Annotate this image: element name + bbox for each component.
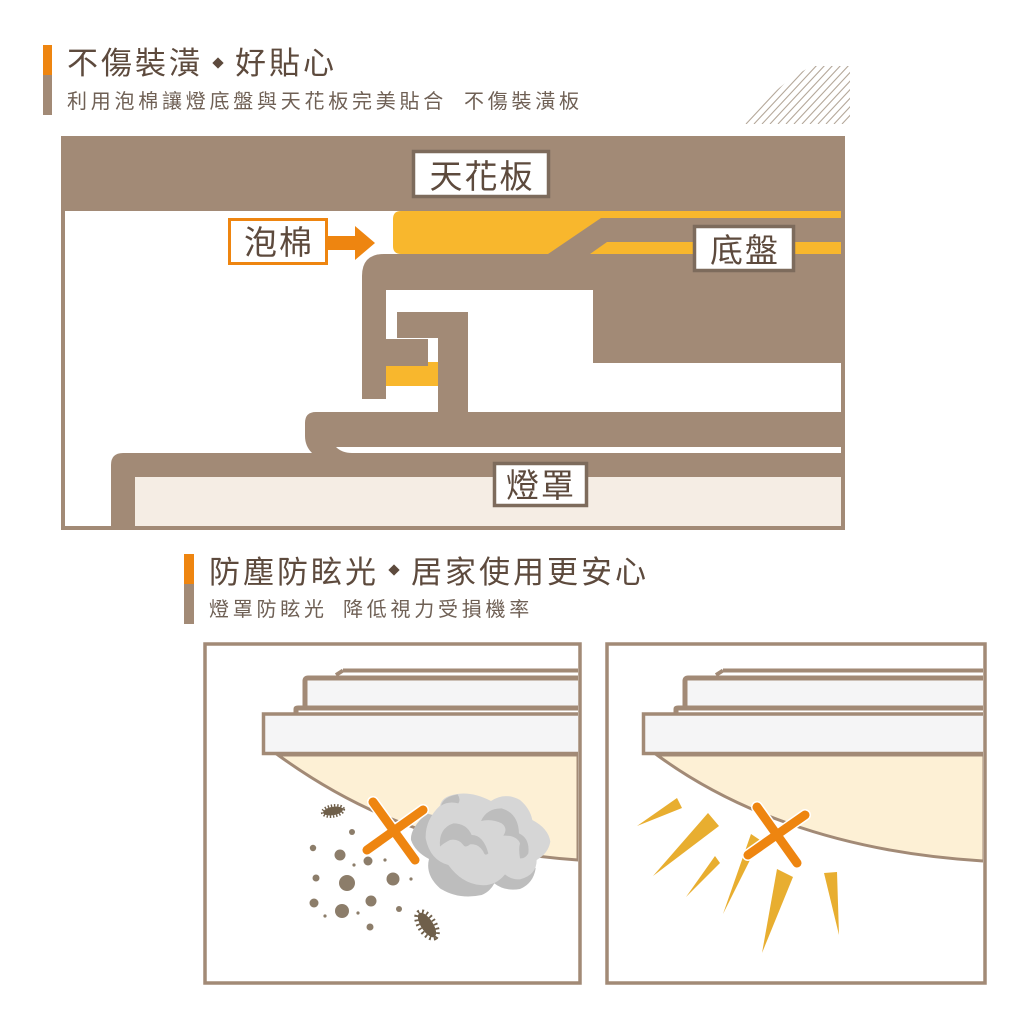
label: base plate: 底盤 [710, 232, 780, 269]
panel: dust protection [205, 644, 584, 983]
title: 居家使用更安心 [411, 555, 649, 590]
lamp body [264, 670, 584, 754]
subtitle: 降低視力受損機率 [343, 598, 533, 621]
title: 防塵防眩光 [209, 555, 379, 590]
subtitle: 燈罩防眩光 [209, 598, 328, 621]
title [67, 46, 337, 81]
label: cover [494, 464, 586, 506]
subtitle [209, 598, 533, 621]
icon: orange cross [367, 802, 423, 860]
lamp body [644, 670, 988, 754]
panel: cross-section diagram [61, 136, 845, 528]
title: 好貼心 [235, 46, 337, 81]
icon: glare rays [637, 798, 839, 953]
title [209, 555, 649, 590]
lamp cover [111, 453, 841, 527]
lower foam [386, 362, 438, 386]
lamp dome [657, 755, 984, 861]
diagram frame [63, 138, 843, 528]
heading accent bar [43, 45, 52, 115]
decorative hatch [746, 66, 850, 124]
label: cover: 燈罩 [506, 467, 576, 504]
base plate [362, 218, 841, 399]
icon: orange cross [748, 807, 805, 863]
clip bracket [397, 312, 468, 412]
lamp dome [278, 755, 578, 860]
foam [393, 211, 841, 254]
arrow [328, 226, 375, 260]
title: 不傷裝潢 [67, 46, 203, 81]
label: ceiling [414, 152, 548, 196]
icon: germ large [412, 908, 442, 942]
icon: germ small [321, 804, 345, 818]
panel: glare protection [607, 644, 988, 983]
lamp illustration [644, 670, 988, 861]
label: foam: 泡棉 [244, 224, 314, 261]
panel frame [607, 644, 985, 983]
label: base plate [694, 226, 794, 270]
heading accent bar [184, 554, 194, 624]
dust particles [310, 829, 413, 930]
inner bar [305, 412, 841, 453]
cover interior [135, 477, 841, 526]
heading: top section [43, 45, 447, 115]
base plate yellow strip [590, 242, 841, 254]
panel frame [205, 644, 580, 983]
subtitle: 利用泡棉讓燈底盤與天花板完美貼合 [67, 90, 447, 113]
subtitle continuation: 不傷裝潢板 [464, 90, 583, 113]
icon: dust cloud [411, 793, 550, 896]
heading: lower section [184, 554, 649, 624]
label: foam [230, 220, 326, 264]
bracket tooth [386, 339, 428, 366]
lamp illustration [264, 670, 584, 860]
ceiling band [61, 136, 845, 211]
label: ceiling: 天花板 [430, 158, 534, 195]
